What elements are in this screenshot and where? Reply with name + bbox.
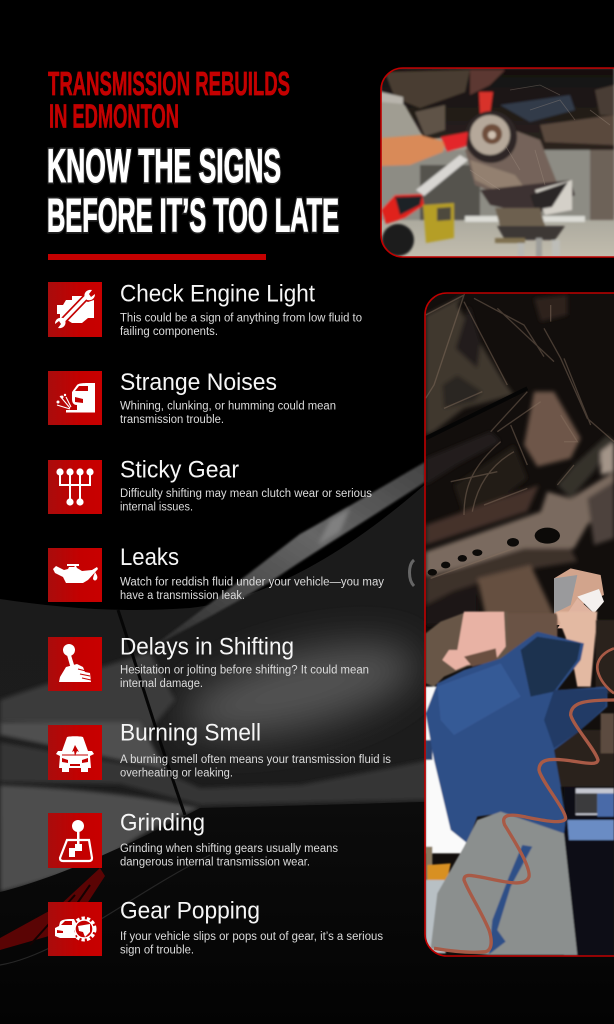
text: check engine light: failing components. — [120, 326, 218, 338]
icon: car with flame — [48, 725, 102, 780]
text: sticky gear — [120, 456, 372, 514]
text: strange noises: Whining, clunking, or humming could mean — [120, 400, 336, 412]
heading: red title: IN EDMONTON — [49, 98, 179, 136]
text: delays in shifting: internal damage. — [120, 678, 203, 690]
text: strange noises: transmission trouble. — [120, 414, 224, 426]
icon: gear stick — [48, 637, 102, 691]
heading: white title — [47, 139, 339, 242]
text: check engine light — [120, 280, 362, 338]
mechanic and hose — [426, 612, 614, 957]
item: check engine light — [48, 280, 362, 338]
text: leaks — [120, 544, 384, 602]
heading: red title: TRANSMISSION REBUILDS — [48, 66, 290, 103]
heading: white title: BEFORE IT’S TOO LATE — [47, 188, 339, 242]
icon: oil can — [48, 548, 102, 602]
text: check engine light: Check Engine Light — [120, 280, 315, 308]
item: gear popping — [48, 898, 383, 956]
text: grinding: Grinding when shifting gears usually means — [120, 843, 338, 855]
text: burning smell: overheating or leaking. — [120, 768, 233, 780]
icon: car with noise lines — [48, 371, 102, 425]
text: leaks: Leaks — [120, 544, 179, 571]
text: strange noises — [120, 369, 336, 426]
text: grinding: Grinding — [120, 810, 205, 836]
text: leaks: Watch for reddish fluid under your vehicle—you may — [120, 576, 384, 588]
icon: gear shift pattern — [48, 460, 102, 514]
text: leaks: have a transmission leak. — [120, 590, 245, 602]
text: grinding — [120, 810, 338, 868]
text: burning smell — [120, 720, 391, 780]
text: gear popping: Gear Popping — [120, 898, 260, 924]
text: grinding: dangerous internal transmission wear. — [120, 856, 310, 868]
heading: white title: BEFORE IT’S TOO LATE — [47, 188, 339, 242]
text: delays in shifting: Hesitation or jolting before shifting? It could mean — [120, 664, 369, 676]
text: sticky gear: internal issues. — [120, 502, 193, 514]
text: gear popping: If your vehicle slips or pops out of gear, it’s a serious — [120, 931, 383, 943]
icon: shifter in gate — [48, 813, 102, 868]
icon: car and gear — [48, 902, 102, 956]
heading: white title: KNOW THE SIGNS — [47, 139, 281, 192]
text: gear popping: sign of trouble. — [120, 944, 194, 956]
item: delays in shifting — [48, 634, 369, 691]
item: burning smell — [48, 720, 391, 780]
item: strange noises — [48, 369, 336, 426]
text: burning smell: A burning smell often means your transmission fluid is — [120, 754, 391, 766]
item: grinding — [48, 810, 338, 868]
photo: mechanic under vehicle — [425, 293, 614, 957]
heading underline — [48, 254, 266, 260]
heading: red title — [48, 66, 290, 136]
text: check engine light: This could be a sign of anything from low fluid to — [120, 312, 362, 324]
icon: engine and wrench — [48, 282, 102, 337]
photo: technician working on transmission — [381, 68, 614, 257]
text: strange noises: Strange Noises — [120, 369, 277, 396]
item: sticky gear — [48, 456, 372, 514]
text: delays in shifting: Delays in Shifting — [120, 634, 294, 660]
text: sticky gear: Sticky Gear — [120, 456, 239, 484]
text: burning smell: Burning Smell — [120, 720, 261, 746]
item: leaks — [48, 544, 384, 602]
engine bay — [426, 295, 614, 628]
heading: white title: KNOW THE SIGNS — [47, 139, 281, 192]
text: gear popping — [120, 898, 383, 956]
text: sticky gear: Difficulty shifting may mean clutch wear or serious — [120, 488, 372, 500]
text: delays in shifting — [120, 634, 369, 690]
